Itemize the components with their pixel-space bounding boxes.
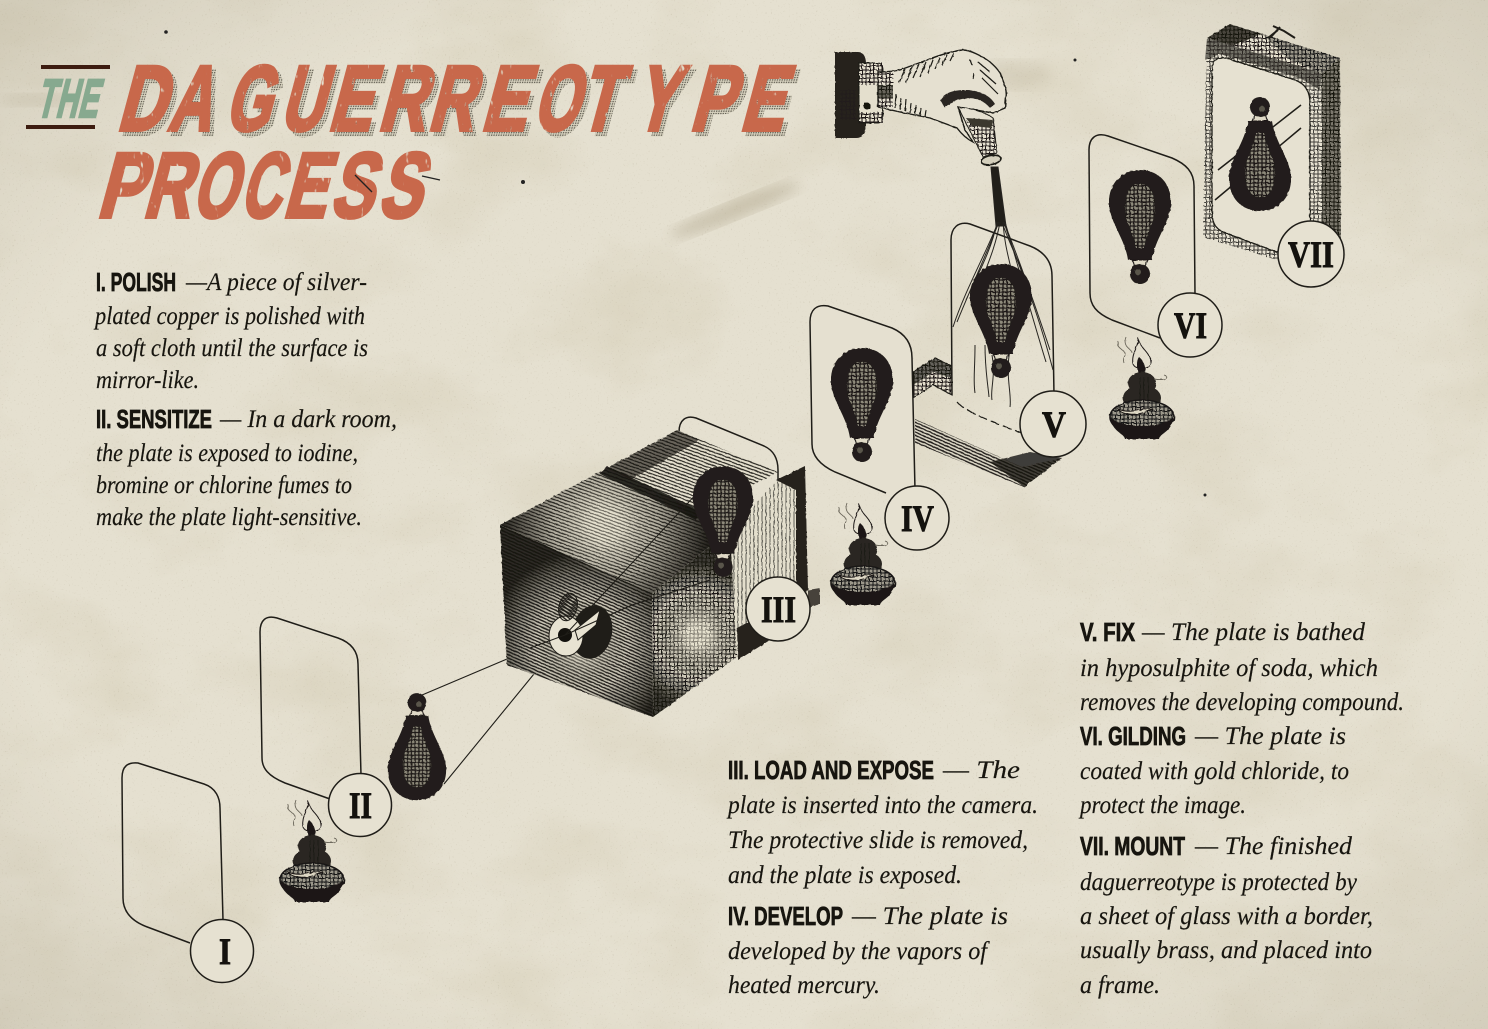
word: DAGUERREOTYPE: E [475, 46, 547, 150]
shirt cuff [835, 52, 883, 138]
word: DAGUERREOTYPE: A [166, 51, 236, 154]
text block: steps III and IV: and the plate is exposed. [728, 862, 962, 889]
word: DAGUERREOTYPE: P [684, 46, 754, 150]
word: DAGUERREOTYPE: E [322, 46, 392, 150]
word: DAGUERREOTYPE: D [115, 51, 190, 154]
text block: steps V, VI and VII: coated with gold chloride, to [1080, 758, 1349, 785]
numeral V: V [1042, 405, 1066, 446]
numeral IV [885, 486, 949, 550]
text block: steps III and IV: heated mercury. [728, 972, 880, 999]
text block: steps I and II: I. POLISH [96, 267, 176, 297]
illustration: step II plate and lamp [260, 617, 392, 902]
text block: steps III and IV: — The plate is [851, 903, 1008, 930]
word: DAGUERREOTYPE: U [278, 51, 348, 154]
word: DAGUERREOTYPE: T [573, 46, 638, 150]
text block: steps III and IV: III. LOAD AND EXPOSE [728, 755, 934, 785]
word: DAGUERREOTYPE: A [162, 46, 232, 150]
text block: steps I and II: II. SENSITIZE [96, 404, 212, 434]
text block: steps I and II: the plate is exposed to iodine, [96, 440, 358, 467]
hand [878, 50, 1006, 142]
word: DAGUERREOTYPE: E [479, 51, 551, 154]
protective slide [679, 417, 778, 480]
word: DAGUERREOTYPE: R [376, 51, 450, 154]
icon: lamp II [280, 800, 344, 902]
text block: steps I and II: mirror-like. [96, 367, 199, 394]
balloon image on plate V [970, 264, 1032, 378]
word: THE: THE [33, 70, 109, 129]
illustration: step III camera [500, 417, 820, 717]
word: DAGUERREOTYPE: G [219, 46, 291, 150]
numeral VII [1278, 221, 1344, 287]
camera body [500, 430, 820, 717]
text block: steps I and II: a soft cloth until the surface is [96, 335, 368, 362]
text block: steps V, VI and VII: removes the developing compound. [1080, 689, 1404, 716]
plate II: II [349, 786, 372, 827]
numeral VI: VI [1174, 306, 1207, 347]
illustration: step I plate [122, 763, 254, 982]
text block: steps III and IV [726, 755, 1038, 999]
word: DAGUERREOTYPE: D [111, 46, 186, 150]
word: DAGUERREOTYPE: E [326, 51, 396, 154]
word: PROCESS [91, 133, 442, 237]
word: DAGUERREOTYPE: R [426, 51, 498, 154]
balloon image on plate III [693, 466, 753, 577]
text block: steps V, VI and VII: daguerreotype is protected by [1080, 869, 1358, 896]
word: DAGUERREOTYPE: U [274, 46, 344, 150]
word: DAGUERREOTYPE: R [422, 46, 494, 150]
picture frame [1203, 24, 1341, 260]
word: DAGUERREOTYPE: Y [628, 46, 696, 150]
word: DAGUERREOTYPE: O [527, 46, 599, 150]
mercury streams [953, 167, 1053, 407]
text block: steps V, VI and VII: VI. GILDING [1080, 721, 1186, 751]
numeral VII: VII [1288, 235, 1334, 276]
text block: steps V, VI and VII: — The finished [1194, 833, 1353, 860]
illustration: step IV plate, balloon and lamp [810, 306, 949, 605]
text block: steps V, VI and VII: in hyposulphite of soda, which [1080, 655, 1378, 682]
text block: steps I and II: plated copper is polished with [93, 303, 365, 330]
nail [1268, 26, 1295, 38]
word: DAGUERREOTYPE: R [372, 46, 446, 150]
text block: steps V, VI and VII: protect the image. [1078, 792, 1246, 819]
balloon image on frame [1229, 97, 1291, 211]
word: DAGUERREOTYPE: E [738, 51, 808, 154]
text block: steps V, VI and VII: a sheet of glass with a border, [1080, 903, 1373, 930]
text block: steps V, VI and VII: V. FIX [1080, 617, 1136, 647]
inverted balloon projected through lens [388, 636, 565, 800]
word: PROCESS: P [91, 133, 164, 237]
text block: steps I and II: make the plate light-sensitive. [96, 504, 362, 531]
plate V [951, 223, 1054, 395]
word: PROCESS: R [137, 133, 211, 237]
word: PROCESS: S [324, 133, 394, 237]
plate VI [1089, 135, 1195, 338]
text block: steps V, VI and VII [1078, 617, 1404, 999]
numeral IV: IV [901, 499, 934, 540]
icon: lamp VI [1110, 337, 1174, 439]
word: DAGUERREOTYPE [111, 46, 808, 154]
text block: steps III and IV: The protective slide is removed, [728, 827, 1028, 854]
word: DAGUERREOTYPE: E [734, 46, 804, 150]
word: PROCESS: O [186, 133, 257, 237]
tray [913, 358, 1062, 487]
text block: steps V, VI and VII: VII. MOUNT [1080, 831, 1185, 861]
rays through camera [530, 490, 710, 648]
balloon image on plate IV [831, 348, 893, 462]
word: PROCESS: E [277, 133, 347, 237]
plate IV [810, 306, 915, 493]
word: DAGUERREOTYPE: G [223, 51, 295, 154]
text block: steps III and IV: — The [942, 757, 1020, 784]
numeral V [1020, 391, 1086, 457]
text block: steps I and II: — In a dark room, [219, 406, 397, 433]
text block: steps V, VI and VII: a frame. [1080, 972, 1160, 999]
text block: steps III and IV: plate is inserted into the camera. [726, 792, 1038, 819]
illustration: step VI plate, balloon and lamp [1089, 135, 1222, 439]
illustration: step I plate: I [219, 932, 231, 973]
text block: steps I and II [93, 267, 397, 531]
numeral III [746, 577, 810, 641]
text block: steps V, VI and VII: — The plate is bathed [1141, 619, 1366, 646]
camera lens [549, 591, 617, 663]
word: PROCESS: S [372, 133, 442, 237]
illustration: step V tray, plate and hand [835, 50, 1086, 487]
mirror reflections [1215, 105, 1301, 200]
icon: lamp IV [831, 503, 895, 605]
numeral VI [1158, 293, 1222, 357]
text block: steps III and IV: developed by the vapors of [728, 938, 990, 965]
text block: steps I and II: bromine or chlorine fumes to [96, 472, 352, 499]
balloon image on plate VI [1109, 170, 1171, 284]
hand and bottle [835, 50, 1006, 166]
word: DAGUERREOTYPE: Y [632, 51, 700, 154]
bottle [958, 107, 1002, 166]
title [26, 46, 808, 237]
numeral III: III [761, 590, 796, 631]
word: DAGUERREOTYPE: P [688, 51, 758, 154]
text block: steps V, VI and VII: — The plate is [1194, 723, 1346, 750]
text block: steps III and IV: IV. DEVELOP [728, 901, 843, 931]
word: DAGUERREOTYPE: O [531, 51, 603, 154]
word: PROCESS: C [234, 133, 301, 237]
text block: steps I and II: —A piece of silver- [185, 269, 367, 296]
plate II [260, 617, 392, 836]
word: DAGUERREOTYPE: T [577, 51, 642, 154]
text block: steps V, VI and VII: usually brass, and placed into [1080, 937, 1372, 964]
illustration: step VII frame [1203, 24, 1344, 287]
